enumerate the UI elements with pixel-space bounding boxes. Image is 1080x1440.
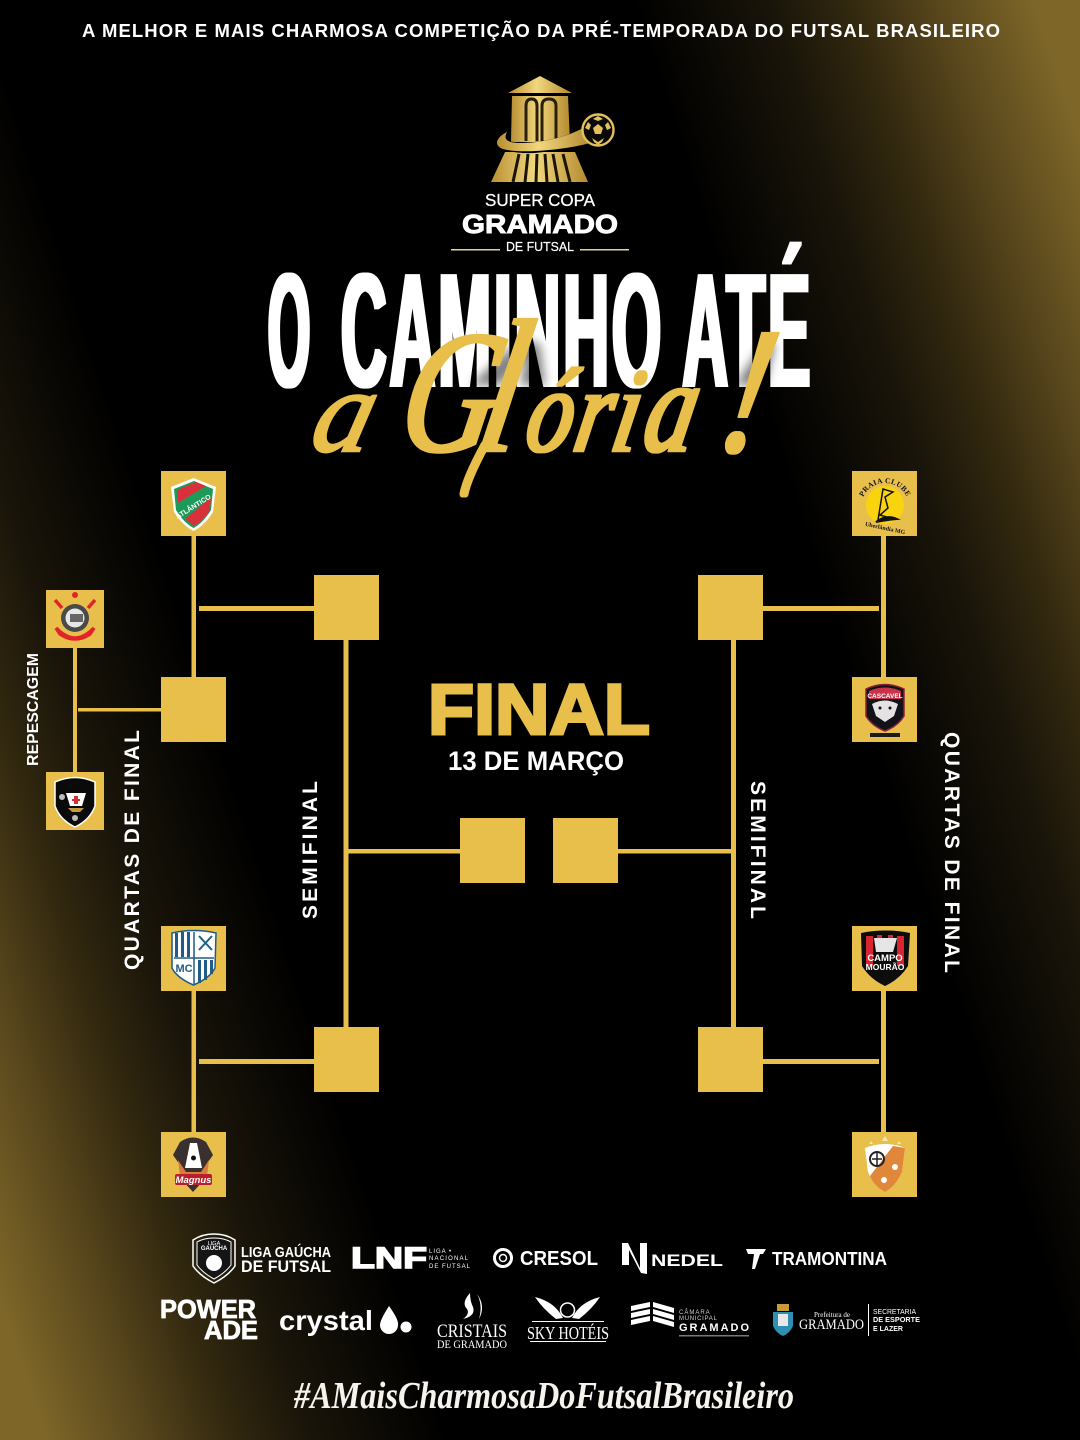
sponsor: Prefeitura de Gramado: GRAMADO xyxy=(799,1317,864,1333)
title script: Glória! xyxy=(387,282,793,494)
sponsor: Prefeitura de Gramado: DE ESPORTE xyxy=(873,1317,920,1324)
team slot: Cascavel xyxy=(852,677,917,742)
team slot: Vasco xyxy=(46,772,104,830)
team slot: Campo Mourão xyxy=(852,926,917,991)
label: quartas de final left: QUARTAS DE FINAL xyxy=(121,730,144,970)
team slot: Praia Clube: PRAIA CLUBE xyxy=(858,478,911,497)
logo wordmark xyxy=(462,190,618,254)
sponsor: Prefeitura de Gramado: Prefeitura de xyxy=(814,1311,850,1319)
team slot: Atlântico xyxy=(161,471,226,536)
sponsor: Liga Gaúcha de Futsal xyxy=(193,1234,331,1283)
sponsor: Cristais de Gramado: CRISTAIS xyxy=(437,1321,507,1342)
sponsor: Câmara Municipal Gramado xyxy=(631,1302,749,1336)
hashtag: #AMaisCharmosaDoFutsalBrasileiro xyxy=(293,1375,794,1417)
final heading: FINAL xyxy=(428,671,650,750)
sponsor: Prefeitura de Gramado: SECRETARIA xyxy=(873,1309,916,1316)
icon: soccer ball xyxy=(582,114,614,146)
sponsor: Câmara Municipal Gramado: CÂMARA xyxy=(679,1309,711,1316)
label: semifinal left: SEMIFINAL xyxy=(299,781,322,919)
sponsor: LNF: LNF xyxy=(351,1242,427,1275)
team slot: Campo Mourão: CAMPO xyxy=(867,953,903,964)
sponsor: Liga Gaúcha de Futsal: GAÚCHA xyxy=(201,1245,228,1252)
icon: golden temple xyxy=(491,76,590,182)
logo wordmark: DE FUTSAL xyxy=(506,239,574,254)
sponsor: Câmara Municipal Gramado: MUNICIPAL xyxy=(679,1316,718,1322)
sponsor: Câmara Municipal Gramado: GRAMADO xyxy=(679,1322,749,1334)
top tagline: A MELHOR E MAIS CHARMOSA COMPETIÇÃO DA PRÉ-TEMPORADA DO FUTSAL BRASILEIRO xyxy=(82,20,1000,41)
title script: Glória!: a xyxy=(635,334,713,480)
sponsor: Cristais de Gramado: DE GRAMADO xyxy=(437,1339,507,1351)
sponsor: Tramontina: TRAMONTINA xyxy=(772,1248,887,1269)
team slot: Corinthians xyxy=(46,590,104,648)
sponsor: LNF: NACIONAL xyxy=(429,1256,469,1262)
sponsor: Nedel: NEDEL xyxy=(651,1251,723,1270)
title script: a: a xyxy=(301,346,393,477)
final slots xyxy=(460,818,618,883)
title shadow xyxy=(470,340,775,385)
label: repescagem: REPESCAGEM xyxy=(25,653,42,766)
sponsor: Powerade xyxy=(160,1294,258,1345)
team slot: empty quarterfinal left top xyxy=(161,677,226,742)
sponsor: Powerade: ADE xyxy=(204,1315,258,1345)
title script: Glória!: i xyxy=(603,345,655,478)
sponsor: Sky Hotéis xyxy=(527,1297,609,1343)
title: O caminho até: CAMINHO ATÉ xyxy=(341,241,813,423)
team slot: Praia Clube: Uberlândia MG xyxy=(864,522,906,536)
team slot: Magnus xyxy=(161,1132,226,1197)
bracket connector lines xyxy=(73,536,886,1132)
team slot: Praia Clube xyxy=(852,471,917,536)
sponsor: Liga Gaúcha de Futsal: LIGA GAÚCHA xyxy=(241,1243,331,1261)
semifinal slots xyxy=(314,575,763,1092)
title script: Glória!: G xyxy=(388,295,521,489)
sponsor: Crystal: crystal xyxy=(279,1305,373,1336)
team slot: Magnus: Magnus xyxy=(176,1175,211,1186)
title script: Glória!: ! xyxy=(708,290,792,490)
team slot: Campo Mourão: MOURÃO xyxy=(866,962,905,972)
sponsor: LNF xyxy=(351,1242,471,1275)
final date: 13 DE MARÇO xyxy=(448,746,624,776)
sponsor: Prefeitura de Gramado: E LAZER xyxy=(873,1326,903,1333)
team slot: orange shield xyxy=(852,1132,917,1197)
logo: Super Copa Gramado de Futsal xyxy=(451,76,629,254)
sponsor: Liga Gaúcha de Futsal: LIGA xyxy=(208,1241,221,1247)
sponsor: Nedel xyxy=(622,1243,723,1274)
title script: Glória!: ó xyxy=(517,345,588,478)
sponsor: Powerade: POWER xyxy=(160,1294,256,1324)
sponsor: LNF: LIGA • xyxy=(429,1249,452,1255)
team slot: Minas: MC xyxy=(175,963,193,975)
team slot: Minas xyxy=(161,926,226,991)
label: semifinal right: SEMIFINAL xyxy=(746,781,769,919)
title script: Glória!: l xyxy=(466,282,547,492)
title script: Glória!: r xyxy=(566,345,628,478)
team slot: Cascavel: CASCAVEL xyxy=(867,693,903,700)
sponsor: LNF: DE FUTSAL xyxy=(429,1264,471,1270)
team slot: Atlântico: ATLÂNTICO xyxy=(174,492,213,521)
logo wordmark: SUPER COPA xyxy=(485,190,595,210)
sponsor: Cristais de Gramado xyxy=(437,1293,507,1351)
label: quartas de final right: QUARTAS DE FINAL xyxy=(940,732,963,973)
sponsor: Liga Gaúcha de Futsal: DE FUTSAL xyxy=(241,1257,331,1276)
sponsor: Sky Hotéis: SKY HOTÉIS xyxy=(527,1322,609,1343)
title: O caminho até: O xyxy=(268,238,310,422)
sponsor: Prefeitura de Gramado xyxy=(773,1304,920,1336)
sponsor: Crystal xyxy=(279,1305,412,1336)
sponsor: Cresol: CRESOL xyxy=(520,1248,598,1270)
logo wordmark: GRAMADO xyxy=(462,209,618,239)
